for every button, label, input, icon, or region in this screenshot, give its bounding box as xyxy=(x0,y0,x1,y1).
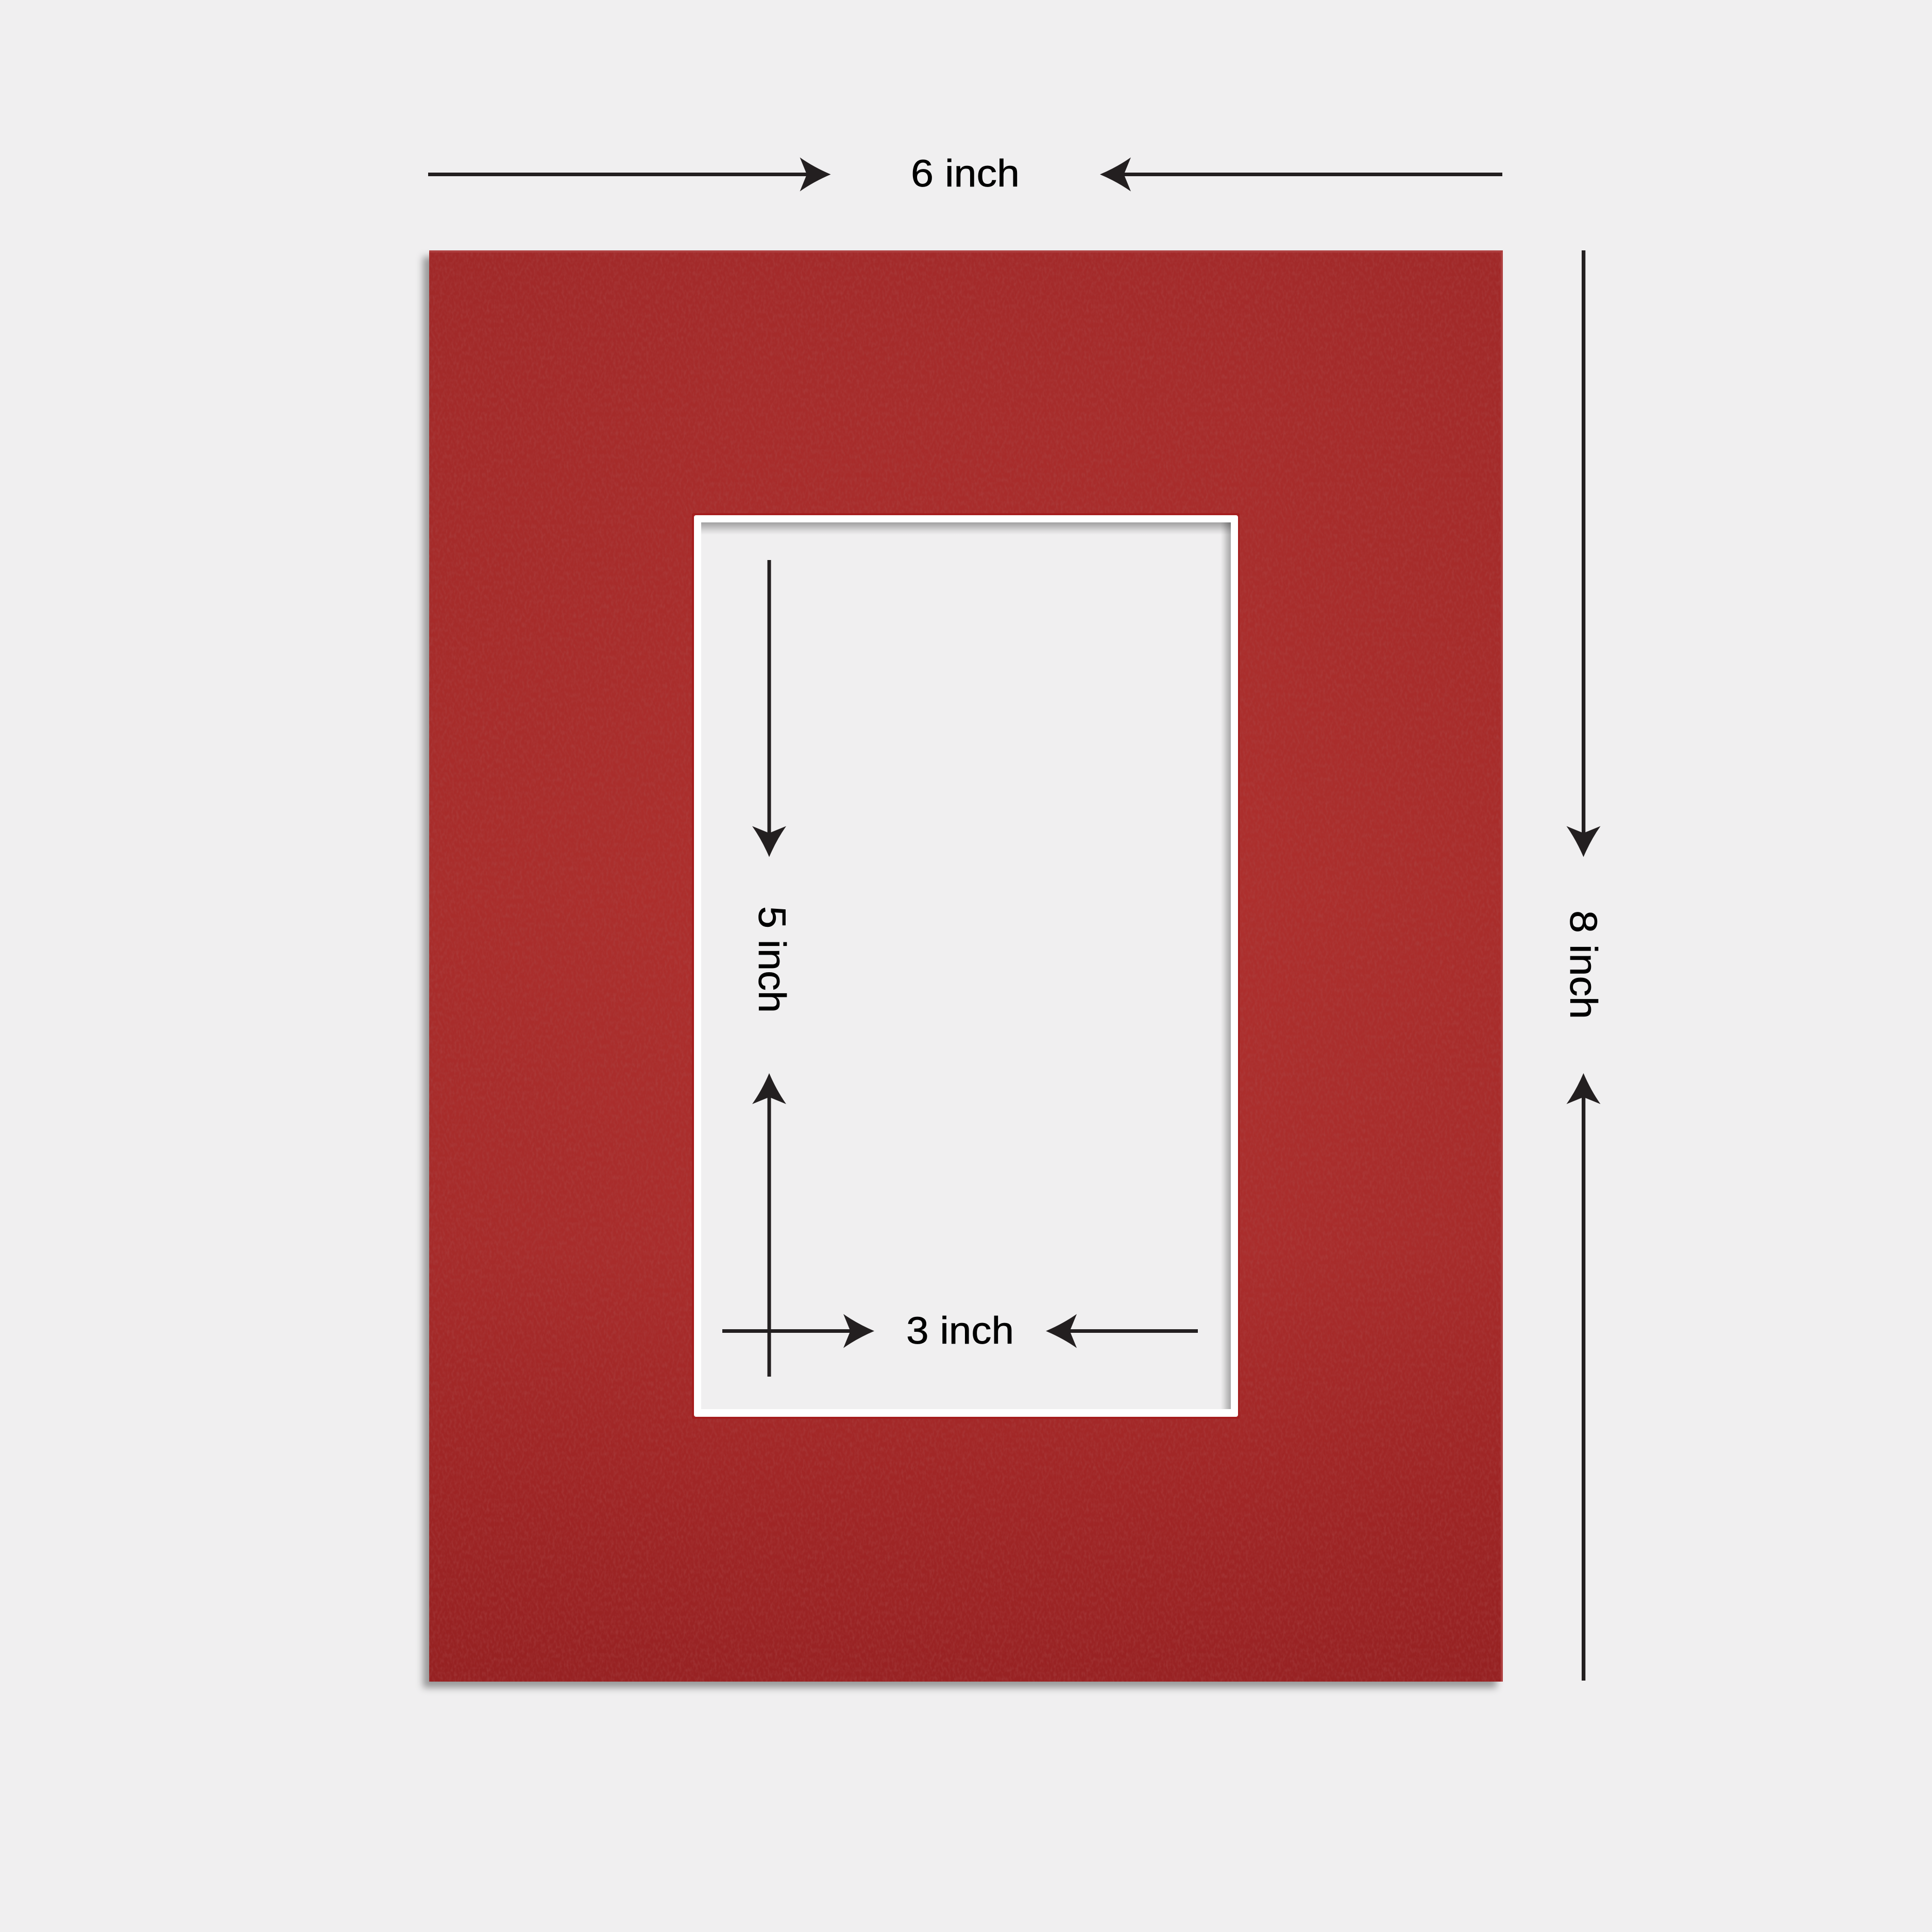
mat top edge highlight xyxy=(429,250,1503,252)
cut edge outline xyxy=(692,513,1240,1419)
dimension: window height 5 inch xyxy=(751,560,793,1377)
mat paper grain xyxy=(429,250,1503,1682)
arrow: top segment pointing down xyxy=(752,560,786,857)
arrow: right segment pointing left xyxy=(1046,1314,1198,1348)
arrow: left segment pointing right xyxy=(722,1314,874,1348)
white bevel xyxy=(694,515,1238,1417)
arrow: bottom segment pointing up xyxy=(1566,1073,1600,1681)
dimension: window width 3 inch xyxy=(722,1309,1198,1352)
dimension: outer width 6 inch xyxy=(428,152,1502,195)
arrow: top segment pointing down xyxy=(1566,250,1600,857)
mat side shading xyxy=(429,250,1503,1682)
arrow: right segment pointing left xyxy=(1100,158,1502,192)
mat right edge highlight xyxy=(1501,250,1503,1682)
arrow: bottom segment pointing up xyxy=(752,1073,786,1377)
label: 8 inch: 8 inch xyxy=(1562,910,1605,1019)
mat board xyxy=(429,250,1503,1682)
inner right shadow xyxy=(1221,522,1231,1409)
arrow: left segment pointing right xyxy=(428,158,831,192)
dimension: outer height 8 inch xyxy=(1562,250,1605,1681)
mat drop shadow xyxy=(423,257,1497,1688)
window opening background xyxy=(701,522,1231,1409)
label: 6 inch: 6 inch xyxy=(911,152,1020,195)
inner top shadow xyxy=(701,522,1231,535)
label: 5 inch: 5 inch xyxy=(751,906,793,1013)
panel: red picture mat xyxy=(423,250,1503,1688)
panel: window opening xyxy=(692,513,1240,1419)
label: 3 inch: 3 inch xyxy=(906,1309,1014,1352)
